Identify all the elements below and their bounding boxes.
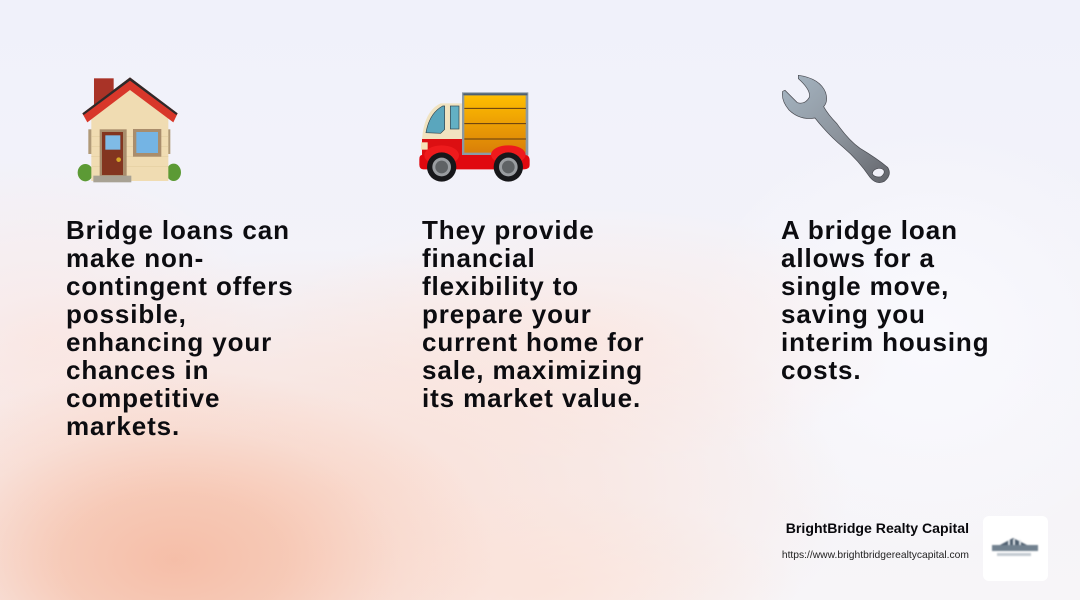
text: column 1: markets. — [66, 411, 180, 441]
text: column 1: Bridge loans can — [66, 215, 290, 245]
text: column 2: prepare your — [422, 299, 592, 329]
text: column 2: current home for — [422, 327, 644, 357]
text: column 3 — [781, 215, 990, 385]
text: column 1: contingent offers — [66, 271, 294, 301]
text: column 2: flexibility to — [422, 271, 579, 301]
text: column 3: allows for a — [781, 243, 935, 273]
text: column 2: its market value. — [422, 383, 641, 413]
text: column 1: competitive — [66, 383, 220, 413]
text: column 3: single move, — [781, 271, 949, 301]
text: column 1: chances in — [66, 355, 209, 385]
text: column 3: interim housing — [781, 327, 990, 357]
text: column 2: financial — [422, 243, 536, 273]
company name: BrightBridge Realty Capital — [786, 520, 969, 536]
icon: logo — [991, 537, 1039, 557]
text: column 3: costs. — [781, 355, 862, 385]
text: column 1 — [66, 215, 294, 441]
website url: https://www.brightbridgerealtycapital.com — [782, 550, 969, 561]
text: column 2 — [422, 215, 644, 413]
text: column 2: They provide — [422, 215, 595, 245]
text: column 1: possible, — [66, 299, 187, 329]
text: column 3: A bridge loan — [781, 215, 958, 245]
text: column 1: enhancing your — [66, 327, 272, 357]
text: column 3: saving you — [781, 299, 926, 329]
logo card — [983, 516, 1048, 581]
text: column 2: sale, maximizing — [422, 355, 643, 385]
text: column 1: make non- — [66, 243, 204, 273]
